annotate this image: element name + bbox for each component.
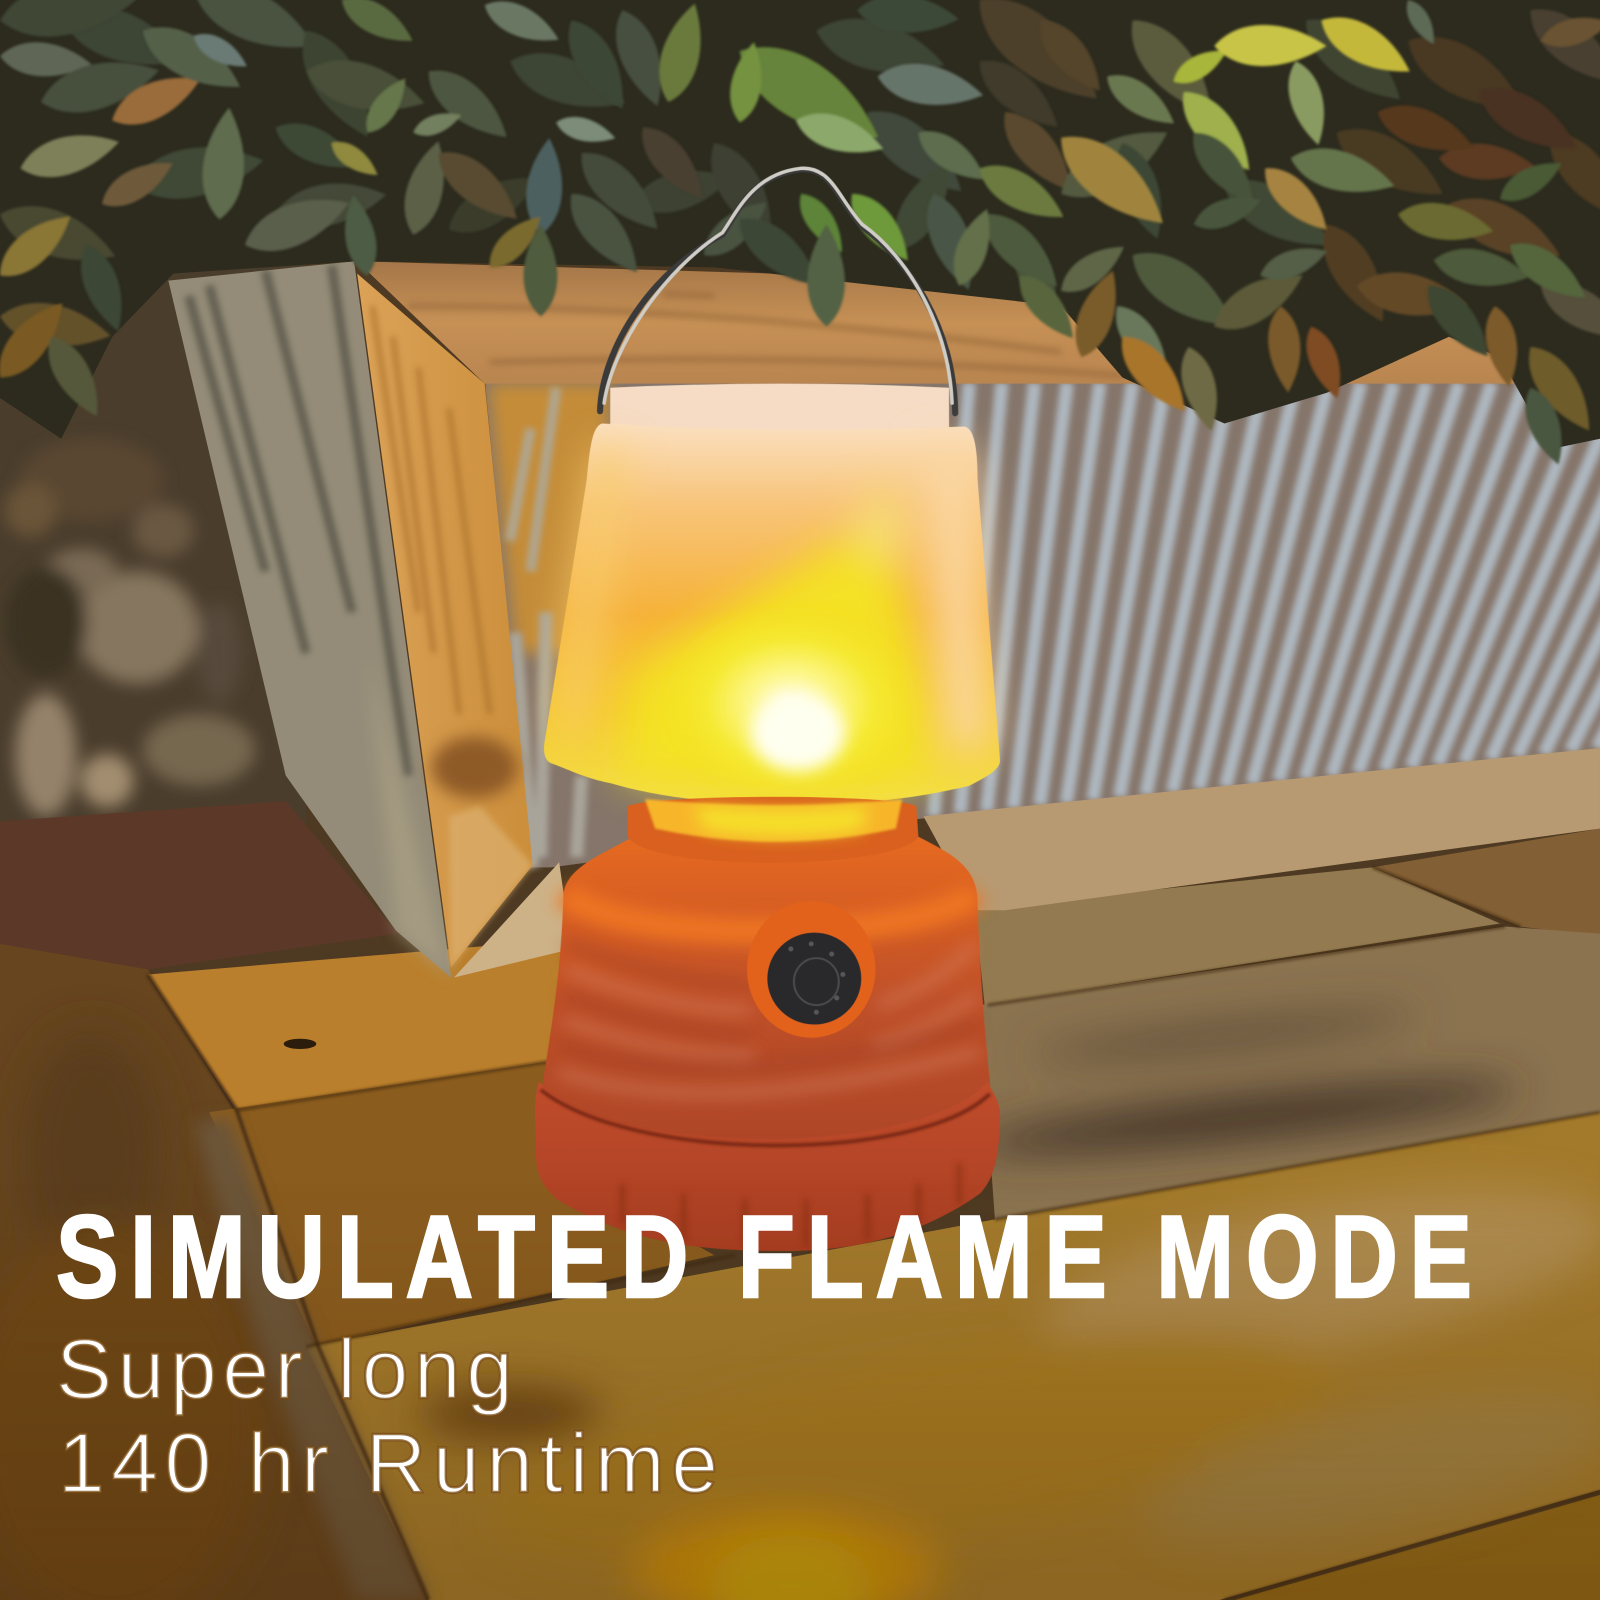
subheading line one: Super long — [56, 1322, 513, 1416]
text block — [56, 1192, 1472, 1510]
planter: corrugated metal panel — [485, 378, 1600, 867]
foliage: under layer of leaves — [0, 0, 1600, 356]
lantern: flame glow — [622, 493, 929, 788]
foliage: dark shadow mass — [0, 0, 1600, 449]
planter: warm lit metal near lantern — [488, 383, 612, 653]
heading: SIMULATED FLAME MODE — [56, 1192, 1472, 1322]
floor — [0, 801, 1600, 1600]
lantern: wire handle — [600, 168, 955, 413]
bottom tint — [0, 1180, 1600, 1600]
planter: corner board — [357, 273, 533, 967]
lantern: ring shadow line — [541, 1090, 990, 1145]
planter: bottom board right — [923, 748, 1600, 910]
floor: worn gray strip — [194, 1117, 429, 1600]
foliage: leaves — [0, 0, 1600, 469]
floor: right rear plank — [974, 867, 1500, 1005]
floor: right middle plank — [980, 927, 1600, 1219]
lantern: button collar — [747, 901, 876, 1038]
lantern: power button — [767, 933, 861, 1024]
planter: weathered left face — [168, 261, 451, 978]
lantern: frosted shade — [544, 423, 1000, 806]
lantern: shade edge highlights — [571, 449, 612, 735]
lantern: glowing neck — [645, 799, 902, 842]
lantern — [535, 168, 1000, 1251]
floor: second plank — [209, 1061, 714, 1347]
floor: rear dark boards — [0, 801, 398, 969]
foliage — [0, 0, 1600, 469]
lantern: neck ring — [628, 797, 918, 863]
lantern: ribbed body — [539, 837, 995, 1163]
lantern: grip notches — [622, 1163, 959, 1247]
planter: bottom board left — [454, 862, 571, 978]
subheading line two: 140 hr Runtime — [58, 1416, 718, 1510]
lantern: base ring — [535, 1082, 1000, 1251]
floor: plank behind lantern — [148, 939, 571, 1110]
planter: top wood board — [357, 261, 1600, 384]
floor: main front plank — [306, 1112, 1600, 1600]
lantern: top collar — [610, 384, 949, 434]
floor: plank seams — [148, 974, 429, 1600]
floor: left strip — [0, 944, 429, 1600]
